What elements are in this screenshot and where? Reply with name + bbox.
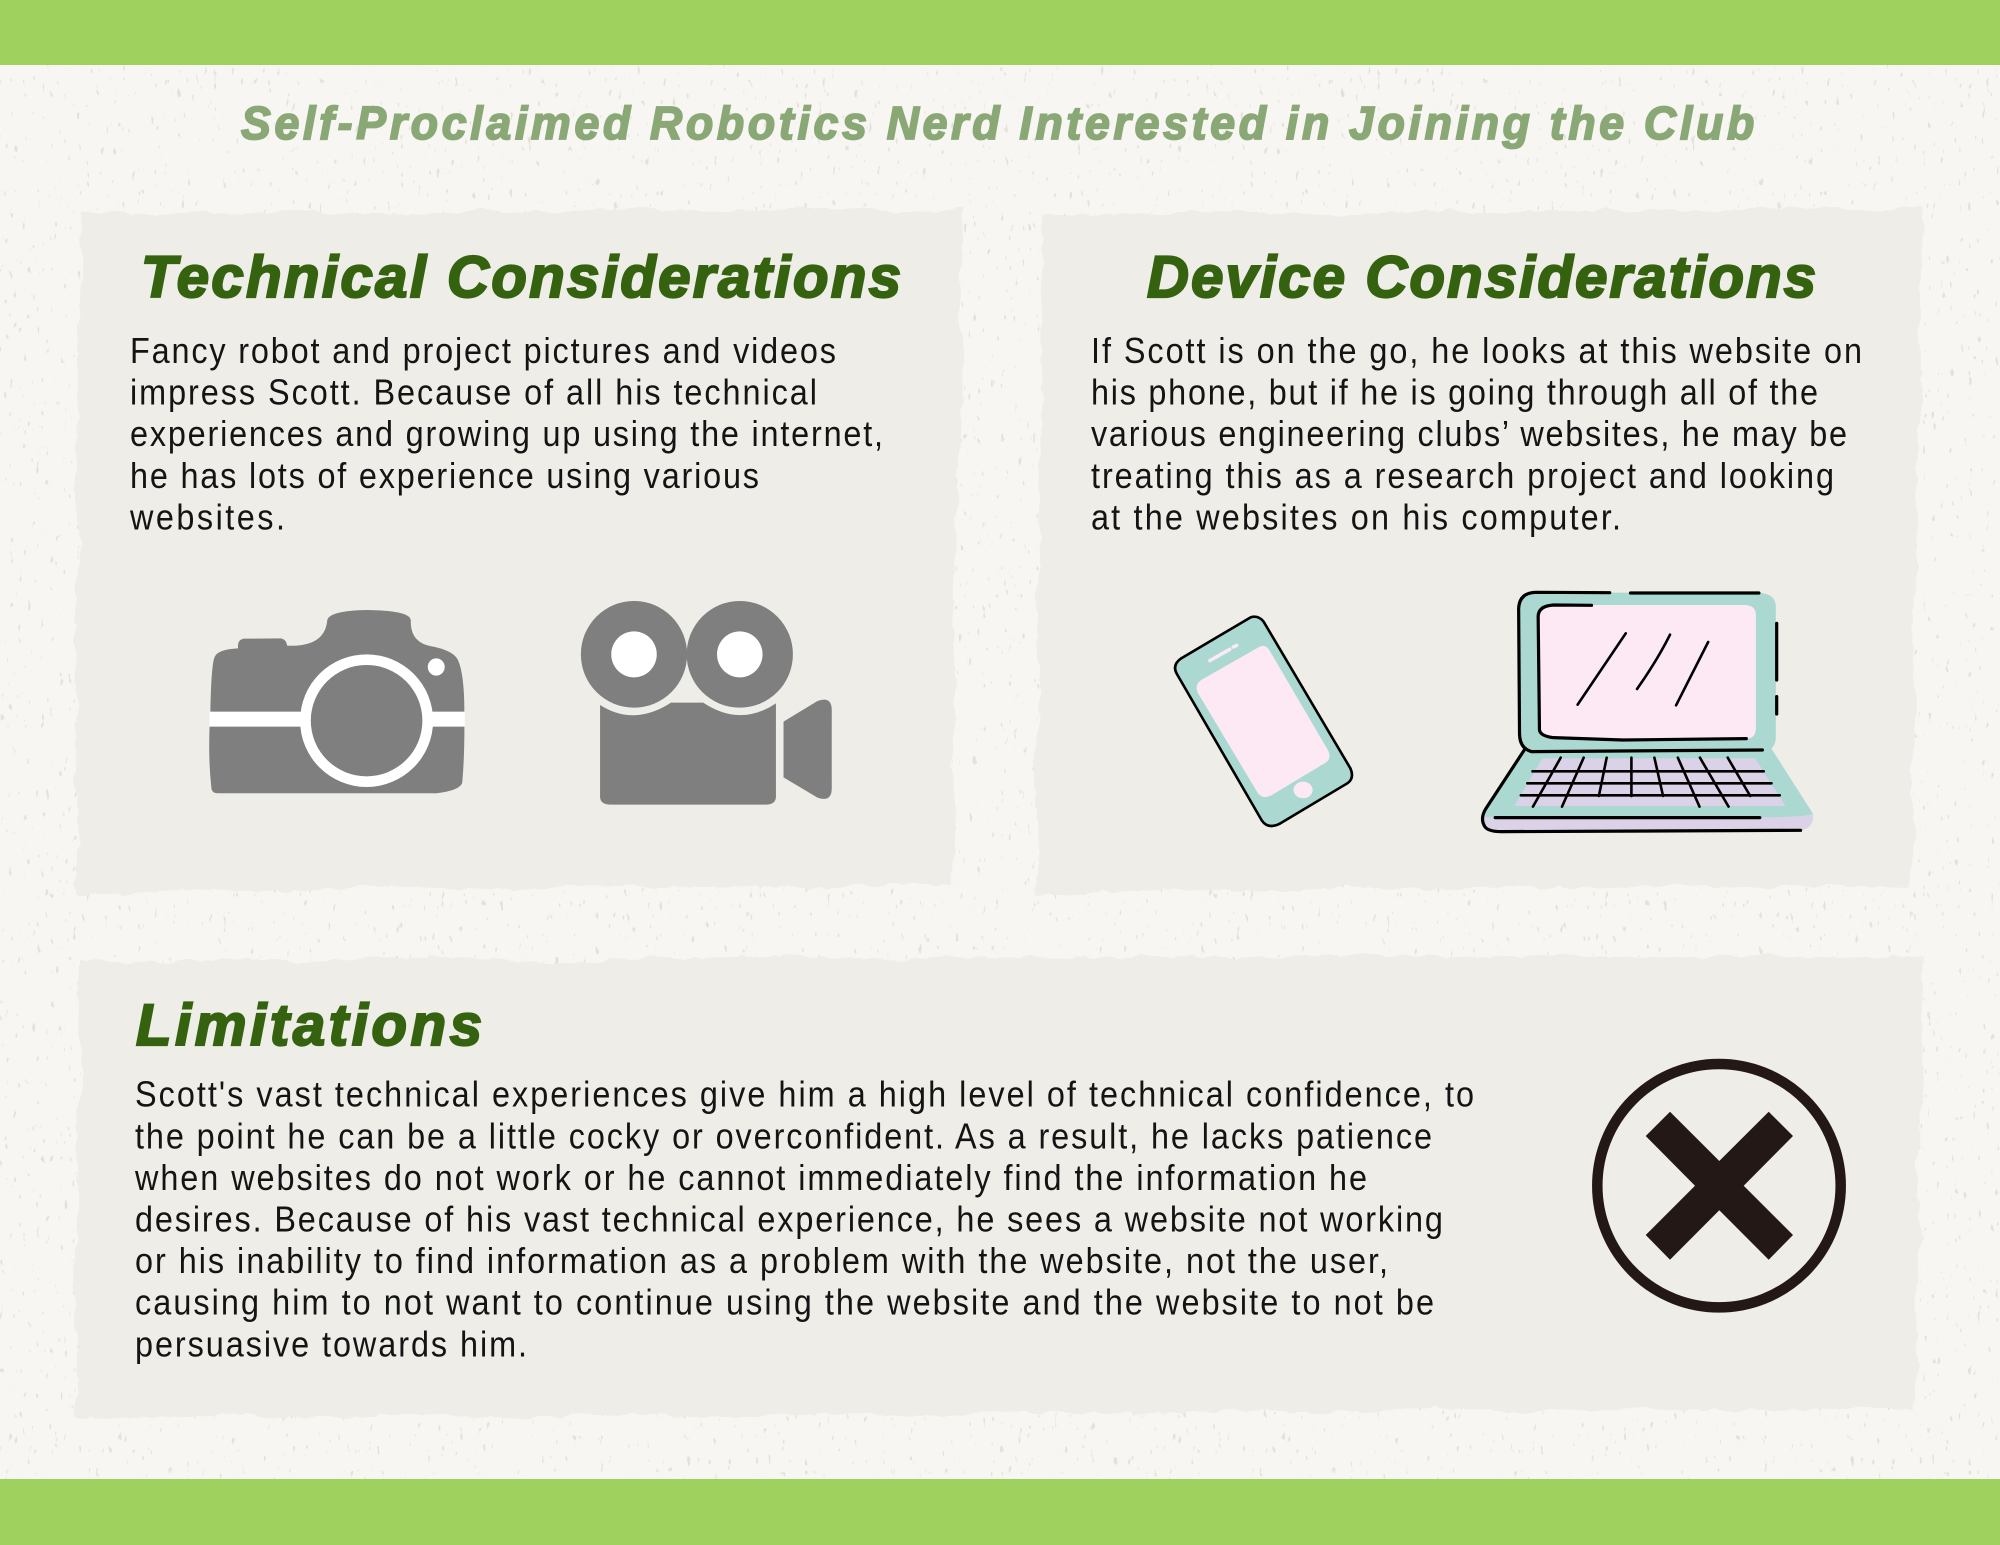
- icon: photo camera: [209, 610, 465, 793]
- body text: limitations: or his inability to find information as a problem with the website, not the user,: [135, 1242, 1388, 1282]
- heading: device considerations: Device Considerations: [1147, 245, 1816, 310]
- icon: cross in circle: [1597, 1064, 1841, 1307]
- panel: limitations: [74, 954, 1924, 1419]
- body text: technical: he has lots of experience using various: [130, 456, 759, 496]
- body text: device: his phone, but if he is going through all of the: [1091, 373, 1818, 413]
- body text: device: If Scott is on the go, he looks at this website on: [1091, 331, 1862, 371]
- icon: video camera: [581, 601, 832, 805]
- panel background: limitations: [74, 954, 1924, 1419]
- body text: technical: impress Scott. Because of all his technical: [130, 373, 817, 413]
- bottom green band: [0, 1479, 2000, 1545]
- panel background: technical: [74, 208, 964, 895]
- top green band: [0, 0, 2000, 65]
- heading: technical considerations: Technical Considerations: [141, 245, 901, 310]
- body text: device: [1091, 331, 1862, 538]
- body text: limitations: [134, 1075, 1474, 1365]
- body text: limitations: persuasive towards him.: [135, 1325, 527, 1365]
- panel: device considerations: [1035, 208, 1924, 895]
- body text: technical: [129, 331, 883, 538]
- icon: smartphone: [1175, 617, 1352, 826]
- body text: limitations: desires. Because of his vast technical experience, he sees a website not working: [135, 1200, 1443, 1240]
- body text: limitations: Scott's vast technical experiences give him a high level of technical confidence, to: [135, 1075, 1474, 1115]
- body text: device: at the websites on his computer.: [1091, 498, 1621, 538]
- title: Self-Proclaimed Robotics Nerd Interested in Joining the Club: [241, 97, 1754, 149]
- body text: limitations: the point he can be a little cocky or overconfident. As a result, he lacks patience: [135, 1117, 1432, 1157]
- body text: device: treating this as a research project and looking: [1091, 456, 1834, 496]
- body text: technical: Fancy robot and project pictures and videos: [130, 331, 836, 371]
- body text: technical: experiences and growing up using the internet,: [130, 415, 883, 455]
- body text: technical: websites.: [129, 498, 285, 538]
- heading: limitations: Limitations: [136, 993, 482, 1058]
- body text: limitations: causing him to not want to continue using the website and the website to not be: [135, 1283, 1434, 1323]
- panel background: device: [1035, 208, 1924, 895]
- icon: laptop: [1483, 592, 1813, 832]
- body text: device: various engineering clubs’ websites, he may be: [1091, 415, 1847, 455]
- panel: technical considerations: [74, 208, 964, 895]
- body text: limitations: when websites do not work or he cannot immediately find the information he: [134, 1158, 1367, 1198]
